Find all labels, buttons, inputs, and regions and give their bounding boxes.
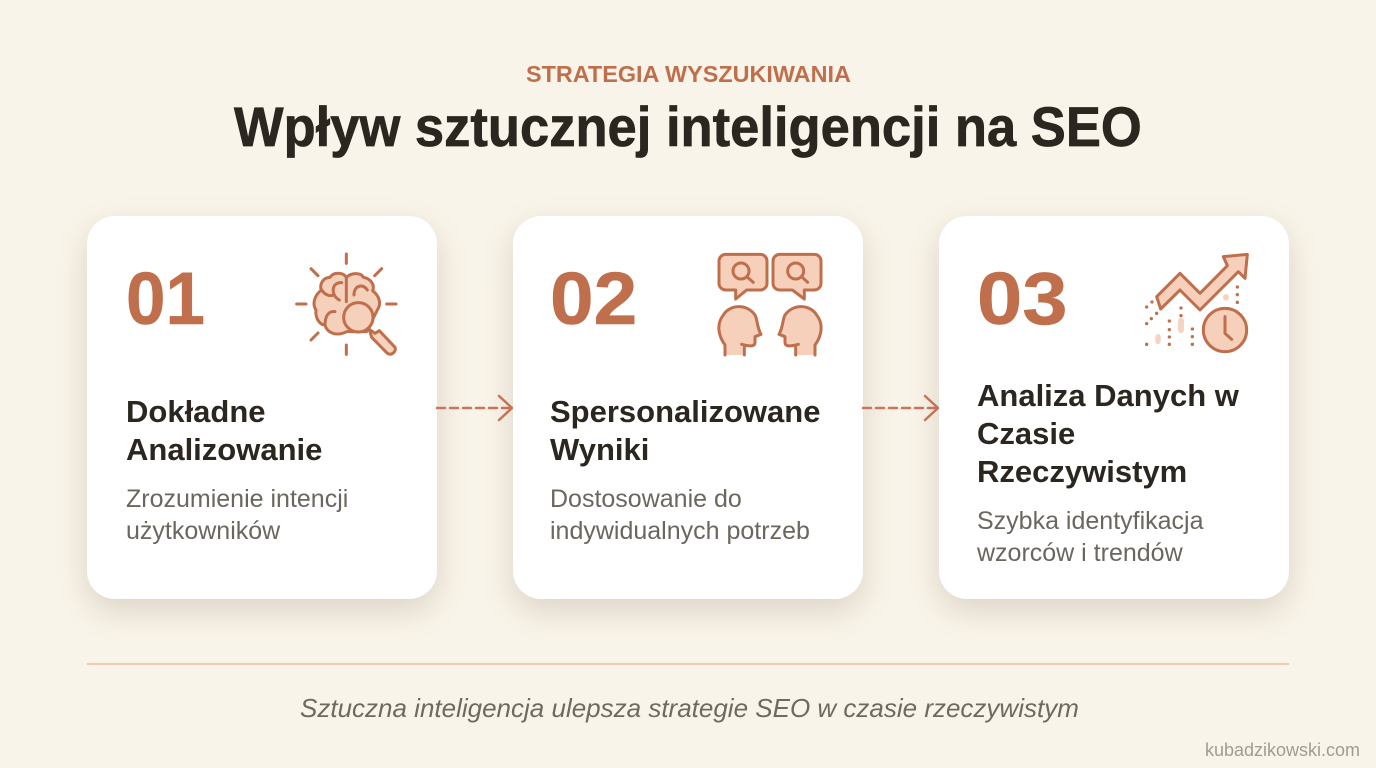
panel: card 2	[513, 216, 863, 599]
text: card 1 description: Zrozumienie intencji	[126, 485, 348, 513]
panel: card 1	[87, 216, 437, 599]
text: card 1 description: użytkowników	[126, 517, 280, 545]
heading: card 3: Czasie	[977, 416, 1075, 451]
heading: card 1	[126, 394, 322, 467]
title: Wpływ sztucznej inteligencji na SEO	[234, 95, 1142, 158]
heading: card 1: Dokładne	[126, 394, 266, 429]
text: card 3 description	[977, 507, 1204, 567]
heading: card 3: Rzeczywistym	[977, 454, 1187, 489]
number 01: 01	[126, 257, 205, 340]
heading: card 2: Spersonalizowane	[550, 394, 820, 429]
text: card 1 description	[126, 485, 348, 545]
heading: card 1: Analizowanie	[126, 432, 322, 467]
footer tagline: Sztuczna inteligencja ulepsza strategie SEO w czasie rzeczywistym	[300, 693, 1079, 723]
icon: two heads with search bubbles	[717, 252, 823, 356]
icon: rising chart with clock	[1145, 252, 1249, 354]
text: card 3 description: Szybka identyfikacja	[977, 507, 1204, 535]
panel: card 3	[939, 216, 1289, 599]
number 03: 03	[977, 257, 1068, 340]
text: card 2 description: Dostosowanie do	[550, 485, 742, 513]
text: card 2 description	[550, 485, 810, 545]
heading: card 3	[977, 378, 1239, 489]
heading: card 2	[550, 394, 820, 467]
divider	[87, 663, 1289, 665]
text: card 3 description: wzorców i trendów	[977, 539, 1183, 567]
text: card 2 description: indywidualnych potrzeb	[550, 517, 810, 545]
heading: card 3: Analiza Danych w	[977, 378, 1239, 413]
heading: card 2: Wyniki	[550, 432, 649, 467]
icon: brain with magnifier	[295, 252, 398, 356]
eyebrow heading: STRATEGIA WYSZUKIWANIA	[526, 61, 851, 87]
watermark: kubadzikowski.com	[1205, 740, 1360, 760]
arrow: 1 to 2	[436, 394, 513, 422]
number 02: 02	[550, 257, 637, 340]
arrow: 2 to 3	[862, 394, 939, 422]
